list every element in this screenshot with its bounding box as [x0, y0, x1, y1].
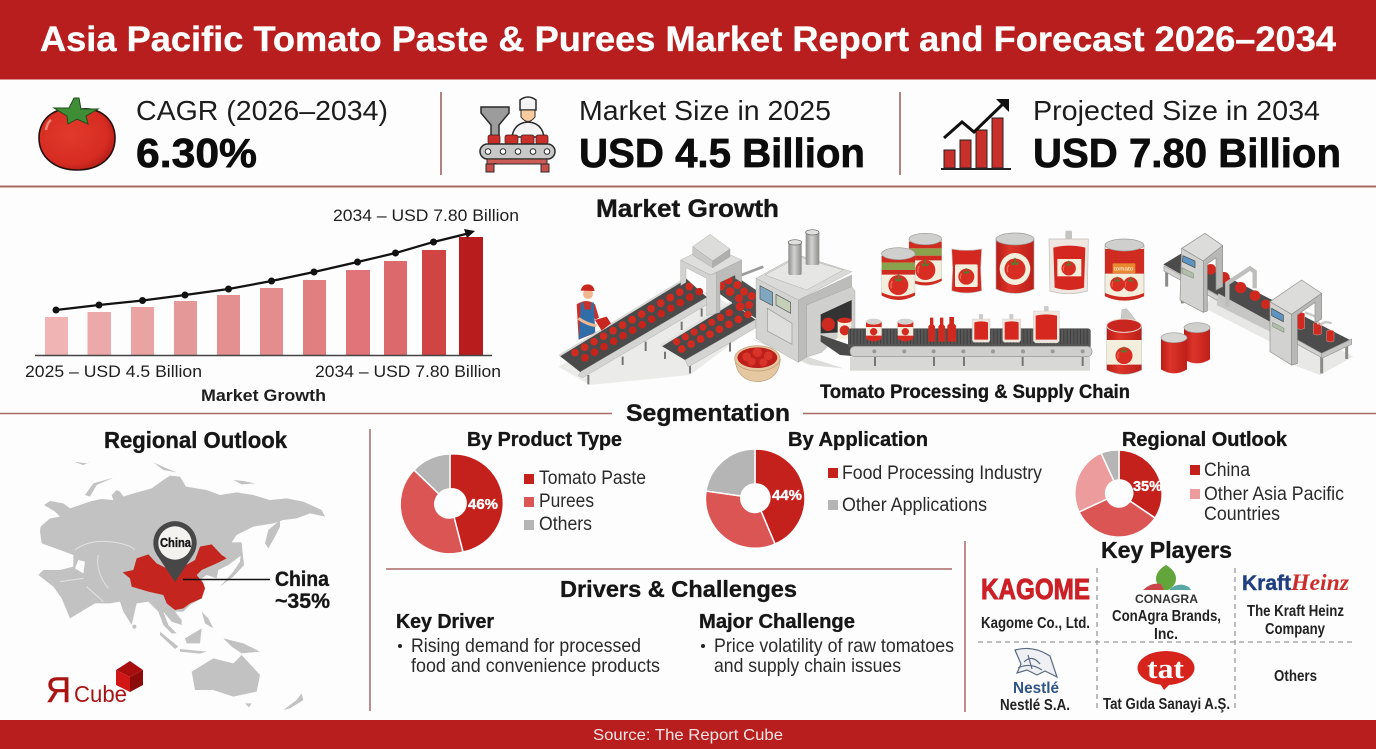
player: Kraft Heinz: The Kraft Heinz	[1247, 603, 1344, 620]
can: open with lid	[1107, 309, 1142, 374]
player: Tat: Tat Gıda Sanayi A.Ş.	[1103, 696, 1230, 713]
heading: Key Players	[1101, 537, 1232, 563]
heading: Drivers & Challenges	[560, 576, 797, 602]
title banner	[0, 0, 1376, 80]
donut chart	[705, 449, 805, 548]
heading: segmentation: Segmentation	[626, 400, 790, 427]
player: Kraft Heinz	[1242, 570, 1349, 638]
map: Asia Pacific	[38, 462, 325, 710]
player: ConAgra	[1112, 565, 1221, 643]
panel: regional outlook map	[38, 427, 330, 710]
pouch: spouted	[1049, 231, 1088, 294]
player: Kraft Heinz: Kraft	[1242, 572, 1291, 595]
player: Kraft Heinz: Heinz	[1290, 570, 1349, 595]
illustration: tomato processing line	[558, 230, 1353, 385]
KPI: CAGR: 6.30%	[136, 130, 257, 176]
heading: market growth: Market Growth	[596, 195, 779, 223]
can: red with tomato	[996, 233, 1034, 293]
major challenge	[699, 611, 954, 677]
panel: by product type	[400, 429, 646, 554]
player: Nestle: Nestlé	[1013, 680, 1059, 697]
legend: Tomato Paste	[539, 468, 646, 489]
red cans front	[1161, 333, 1187, 373]
KPI: projected size 2034: USD 7.80 Billion	[1033, 130, 1341, 176]
KPI: CAGR: CAGR (2026–2034)	[136, 95, 388, 126]
major challenge: Price volatility of raw tomatoes	[714, 635, 954, 657]
legend	[524, 468, 646, 535]
packing conveyor with products	[848, 231, 1144, 374]
footer: source: Source: The Report Cube	[593, 727, 783, 744]
major challenge: Major Challenge	[699, 611, 855, 633]
products on belt	[866, 306, 1059, 343]
player: Kraft Heinz: Company	[1265, 621, 1325, 638]
donut chart	[1075, 450, 1162, 537]
legend	[828, 463, 1042, 516]
KPI strip	[39, 95, 1341, 176]
sorting conveyors, machines and worker	[558, 230, 860, 385]
key driver: Rising demand for processed	[411, 635, 641, 657]
KPI: market size 2025: Market Size in 2025	[579, 95, 831, 126]
panel: by product type: 46%	[468, 496, 498, 513]
bowl of tomatoes	[735, 346, 780, 382]
heading: By Application	[788, 429, 928, 451]
callout: China share: China	[275, 568, 329, 591]
inspection line with cans	[1161, 233, 1353, 375]
icon: tomato	[39, 98, 115, 170]
KPI: market size 2025	[579, 95, 865, 176]
major challenge: and supply chain issues	[714, 655, 901, 677]
KPI: projected size 2034: Projected Size in 2034	[1033, 95, 1320, 126]
logo: Report Cube: Cube	[74, 681, 127, 707]
can: olive band front	[882, 248, 915, 300]
panel: key players	[978, 537, 1354, 714]
map pin: China: China	[160, 536, 192, 550]
legend: China	[1204, 460, 1250, 481]
player: ConAgra: Inc.	[1154, 626, 1178, 643]
player: ConAgra: ConAgra Brands,	[1112, 608, 1221, 625]
bar chart: market growth: 2034 – USD 7.80 Billion	[333, 206, 519, 225]
legend: Other Asia Pacific	[1204, 484, 1344, 505]
bar chart: market growth: 2034 – USD 7.80 Billion	[315, 362, 501, 381]
bar chart: market growth: Market Growth	[201, 386, 326, 405]
red cans rear	[1184, 323, 1210, 363]
worker	[577, 284, 611, 340]
player: Tat	[1103, 651, 1230, 713]
logo: Report Cube: Я	[46, 671, 71, 710]
player: Kagome	[981, 574, 1090, 632]
bar chart: market growth	[25, 206, 519, 405]
player: Tat: tat	[1147, 653, 1184, 685]
key driver: Key Driver	[396, 611, 494, 633]
legend: Food Processing Industry	[842, 463, 1042, 484]
caption: supply chain: Tomato Processing & Supply Chain	[820, 382, 1130, 403]
callout: China share	[183, 568, 330, 613]
callout: China share: ~35%	[275, 590, 330, 613]
donut chart	[400, 454, 503, 554]
key driver: food and convenience products	[411, 655, 660, 677]
can: olive band rear	[909, 233, 942, 285]
player: Others: Others	[1274, 668, 1317, 685]
legend: Purees	[539, 491, 594, 512]
bar chart: market growth: 2025 – USD 4.5 Billion	[25, 362, 202, 381]
player: Kagome: Kagome Co., Ltd.	[981, 615, 1090, 632]
panel: regional share	[1075, 429, 1344, 537]
can: labelled	[1105, 239, 1144, 301]
player: Nestle	[1000, 648, 1070, 714]
can: labelled: tomato	[1114, 266, 1133, 272]
icon: growth chart	[941, 99, 1011, 169]
KPI: market size 2025: USD 4.5 Billion	[579, 130, 865, 176]
icon: processing worker	[480, 97, 555, 172]
legend: Other Applications	[842, 495, 987, 516]
legend	[1190, 460, 1344, 525]
player: Nestle: Nestlé S.A.	[1000, 697, 1070, 714]
legend: Others	[539, 514, 592, 535]
panel: by application: 44%	[772, 487, 802, 504]
KPI: CAGR	[136, 95, 388, 176]
heading: By Product Type	[467, 429, 622, 451]
panel: by application	[705, 429, 1042, 548]
KPI: projected size 2034	[1033, 95, 1341, 176]
pouch: red	[952, 249, 982, 293]
heading: Regional Outlook	[1122, 429, 1288, 451]
map pin: China	[153, 521, 197, 582]
footer: source	[0, 720, 1376, 749]
key driver	[396, 611, 660, 677]
panel: regional share: 35%	[1133, 479, 1162, 495]
legend: Countries	[1204, 504, 1280, 525]
heading: Regional Outlook	[104, 427, 287, 453]
player: ConAgra: CONAGRA	[1135, 592, 1198, 606]
title banner: Asia Pacific Tomato Paste & Purees Market Report and Forecast 2026–2034	[40, 20, 1337, 59]
logo: Report Cube	[46, 661, 143, 710]
player: Kagome: KAGOME	[981, 574, 1090, 606]
panel: drivers and challenges	[396, 576, 954, 677]
